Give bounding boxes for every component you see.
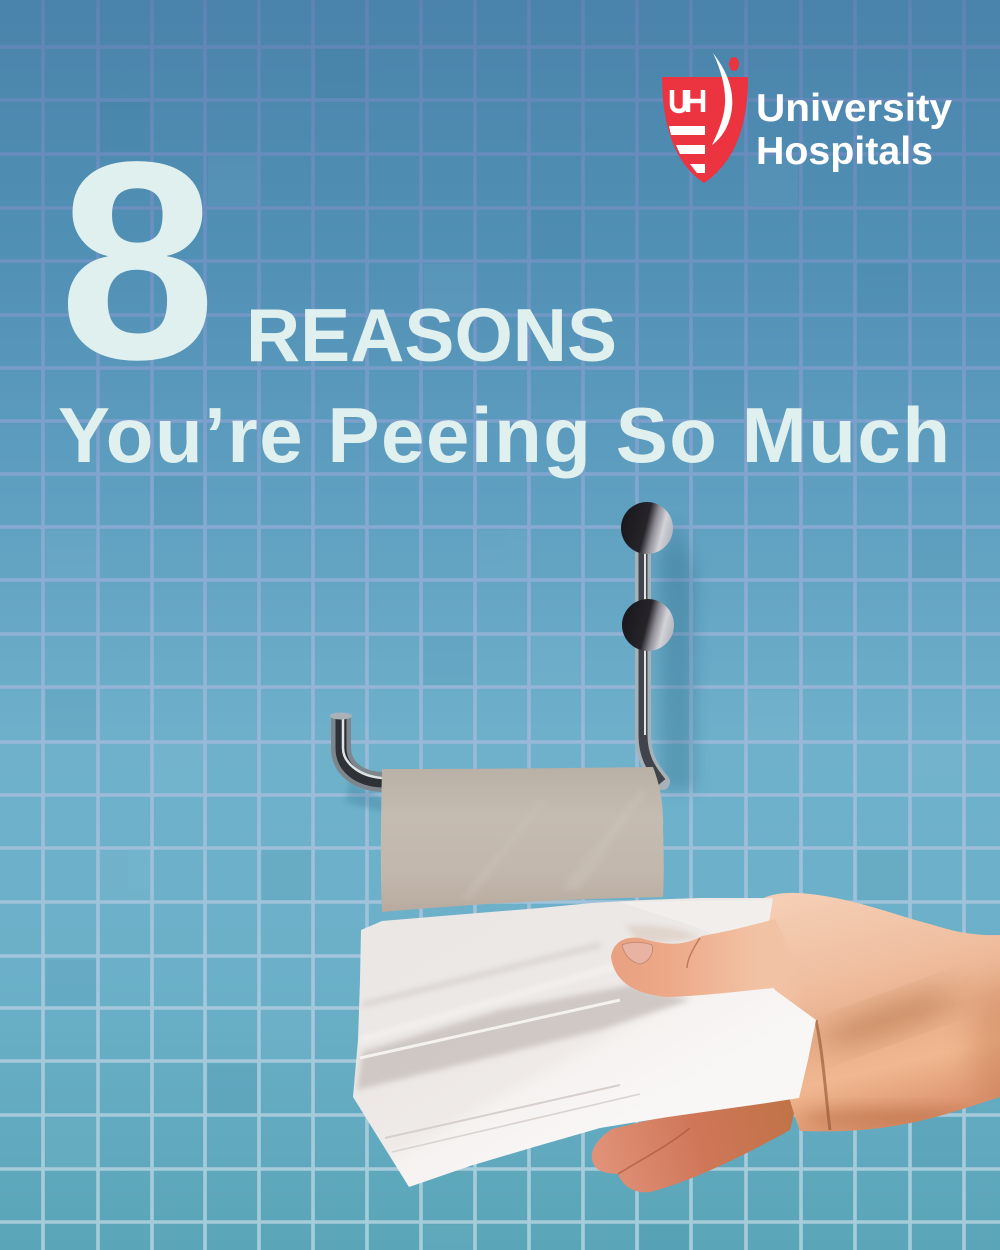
icon: UH shield (662, 53, 748, 183)
holder shadows (660, 520, 695, 790)
logo wordmark (756, 87, 952, 173)
numeral 8: 8 (59, 103, 216, 418)
palm (764, 892, 1000, 1132)
title: 8 Reasons You're Peeing So Much (58, 103, 950, 479)
hand holding paper (340, 885, 1000, 1200)
heading: you're peeing so much: You’re Peeing So Much (58, 391, 950, 479)
logo wordmark: Hospitals (756, 130, 933, 173)
thumb (611, 919, 830, 1030)
logo: University Hospitals (662, 53, 952, 183)
holder knob upper (621, 502, 673, 554)
holder knob lower (622, 599, 674, 651)
heading: reasons: REASONS (246, 293, 617, 377)
holder hook (341, 716, 382, 782)
cardboard tube (381, 767, 664, 912)
paper sheet (353, 898, 816, 1187)
toilet paper holder (330, 502, 695, 812)
logo wordmark: University (756, 87, 952, 130)
lower fingers (592, 1090, 800, 1192)
holder arm (643, 548, 662, 782)
